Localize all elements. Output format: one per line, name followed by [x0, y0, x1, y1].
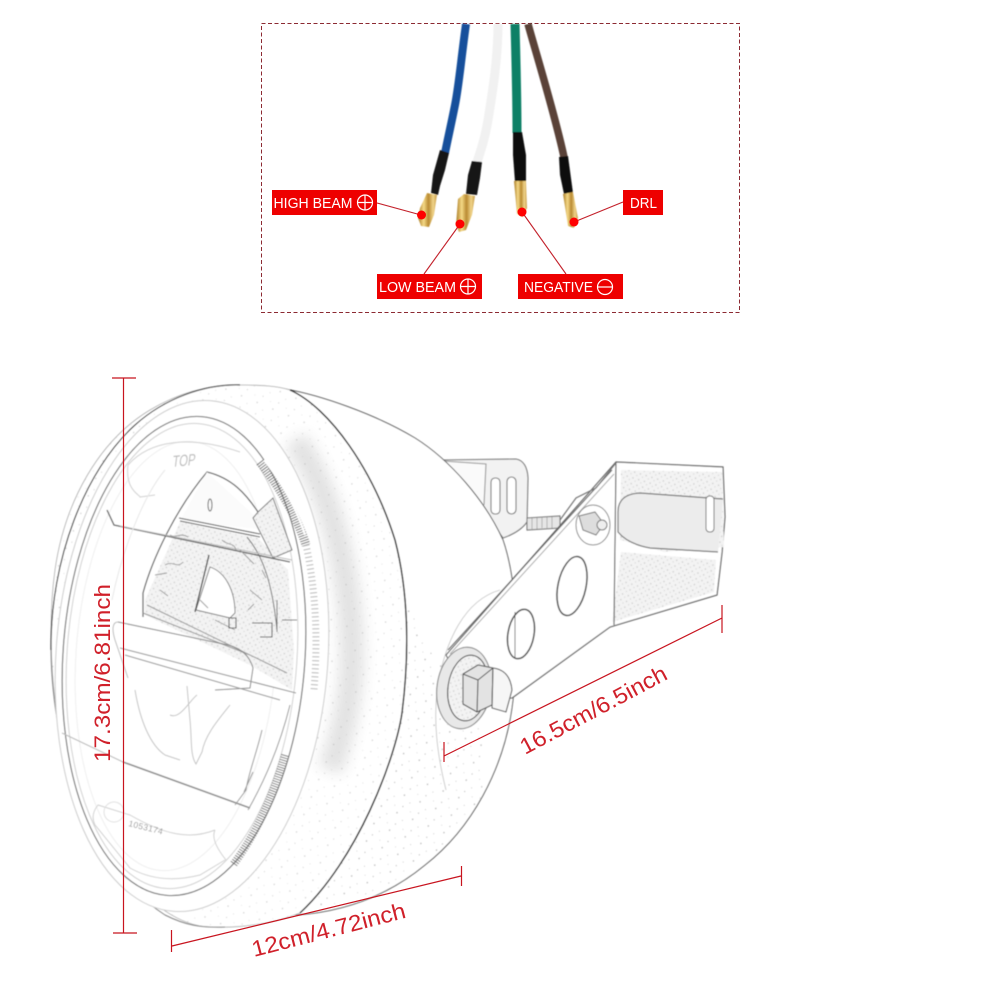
wire: white low beam [456, 24, 498, 232]
callout: low beam [377, 220, 482, 299]
wire: brown DRL [528, 24, 578, 228]
light bars and lower lens detail [62, 442, 296, 879]
text: serial number marking: 1053174 [128, 818, 164, 836]
mounting bracket [446, 462, 725, 700]
callout: DRL: DRL [630, 195, 657, 212]
panel: wiring diagram frame [262, 24, 740, 312]
dimension: height: 17.3cm/6.81inch [90, 584, 115, 762]
wire: green negative [513, 24, 527, 217]
callout: high beam: HIGH BEAM [274, 195, 352, 212]
lens outer ring [38, 391, 346, 921]
headlight front bezel [51, 385, 407, 927]
callout: high beam [272, 190, 426, 220]
dimension: depth [172, 866, 462, 962]
LED ring ribbing [233, 460, 316, 865]
dimension: bracket length [444, 605, 722, 762]
rear bracket with slots [443, 459, 560, 538]
callout: negative [518, 208, 623, 299]
callout: negative: NEGATIVE [524, 279, 593, 296]
callout: DRL [570, 190, 663, 226]
text: TOP marking: TOP [172, 451, 197, 471]
dimension: depth: 12cm/4.72inch [249, 898, 408, 962]
callout: low beam: LOW BEAM [379, 279, 456, 296]
headlight body shell [285, 389, 516, 915]
dimension: height [90, 378, 137, 933]
reflector assembly [107, 472, 297, 690]
wire: blue high beam [418, 24, 466, 227]
headlight line drawing [38, 385, 725, 927]
wires and terminals [418, 24, 578, 232]
mounting bolt and nut [432, 644, 512, 732]
dimension: bracket length: 16.5cm/6.5inch [516, 661, 671, 759]
